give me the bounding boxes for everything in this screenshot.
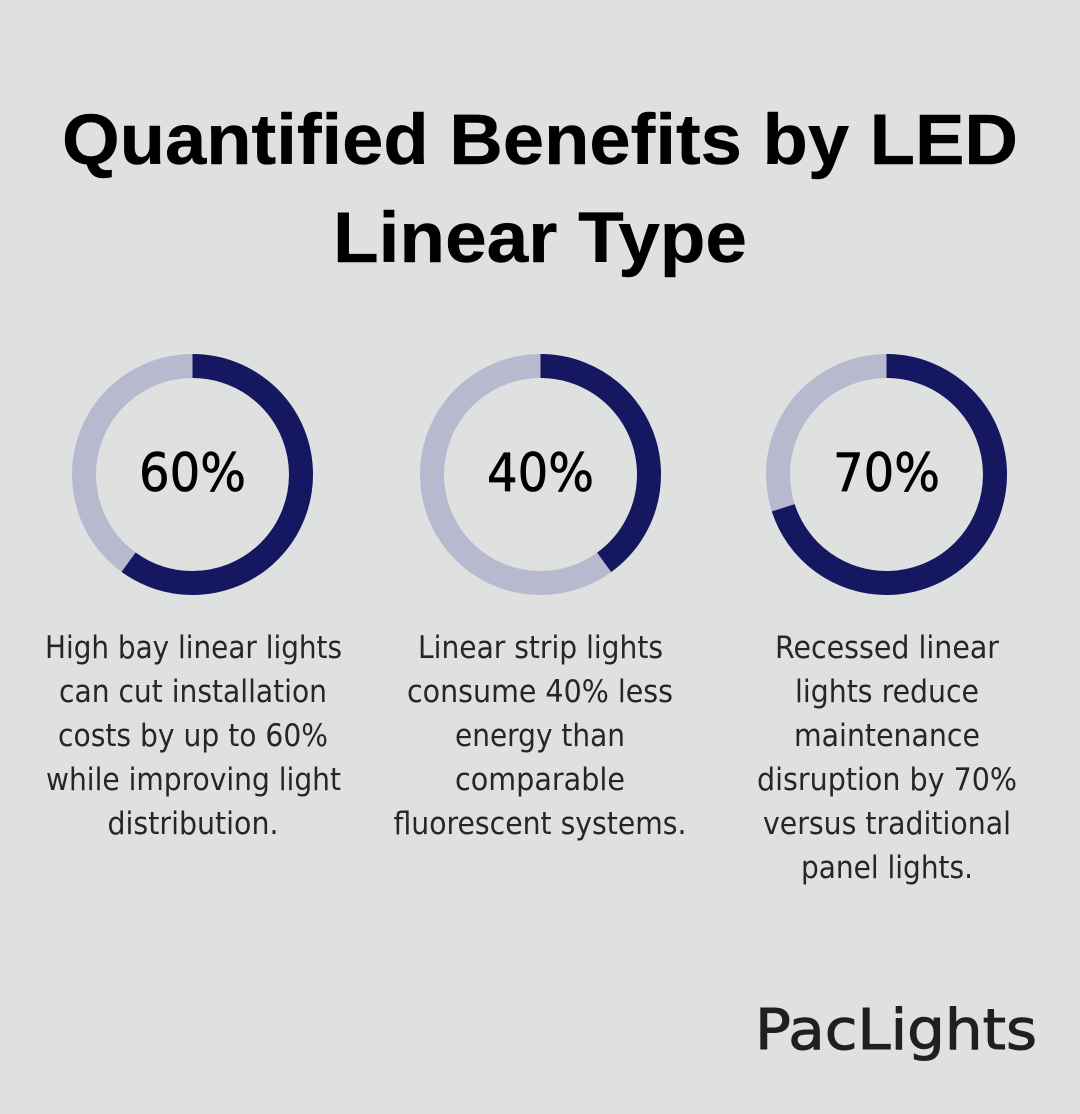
description: recessed (757, 630, 1017, 886)
value: 40%: 40% (487, 443, 594, 504)
description: high bay: while improving light (46, 762, 341, 798)
description: high bay (45, 630, 342, 842)
description: recessed: maintenance (794, 718, 980, 754)
value: 60%: 60% (139, 443, 246, 504)
description: strip lights: Linear strip lights (418, 630, 663, 666)
description: strip lights: consume 40% less (407, 674, 673, 710)
panel: high bay 60% (45, 366, 342, 842)
description: high bay: High bay linear lights (45, 630, 342, 666)
donut chart: 60% (84, 366, 301, 583)
panel: strip lights 40% (394, 366, 686, 842)
description: high bay: costs by up to 60% (58, 718, 328, 754)
description: recessed: disruption by 70% (757, 762, 1017, 798)
panel: recessed 70% (757, 366, 1017, 886)
description: recessed: panel lights. (801, 850, 973, 886)
description: recessed: versus traditional (763, 806, 1011, 842)
description: strip lights: energy than (455, 718, 625, 754)
description: high bay: can cut installation (59, 674, 327, 710)
description: strip lights (394, 630, 686, 842)
donut chart: 70% (778, 366, 995, 583)
title: Quantified Benefits by LED (62, 101, 1018, 180)
title: Linear Type (333, 199, 747, 278)
description: recessed: Recessed linear (775, 630, 999, 666)
description: strip lights: fluorescent systems. (394, 806, 686, 842)
donut chart: 40% (432, 366, 649, 583)
logo: PacLights: PacLights (755, 998, 1037, 1063)
title (62, 101, 1018, 278)
value: 70%: 70% (833, 443, 940, 504)
description: high bay: distribution. (108, 806, 278, 842)
description: strip lights: comparable (455, 762, 625, 798)
description: recessed: lights reduce (795, 674, 979, 710)
